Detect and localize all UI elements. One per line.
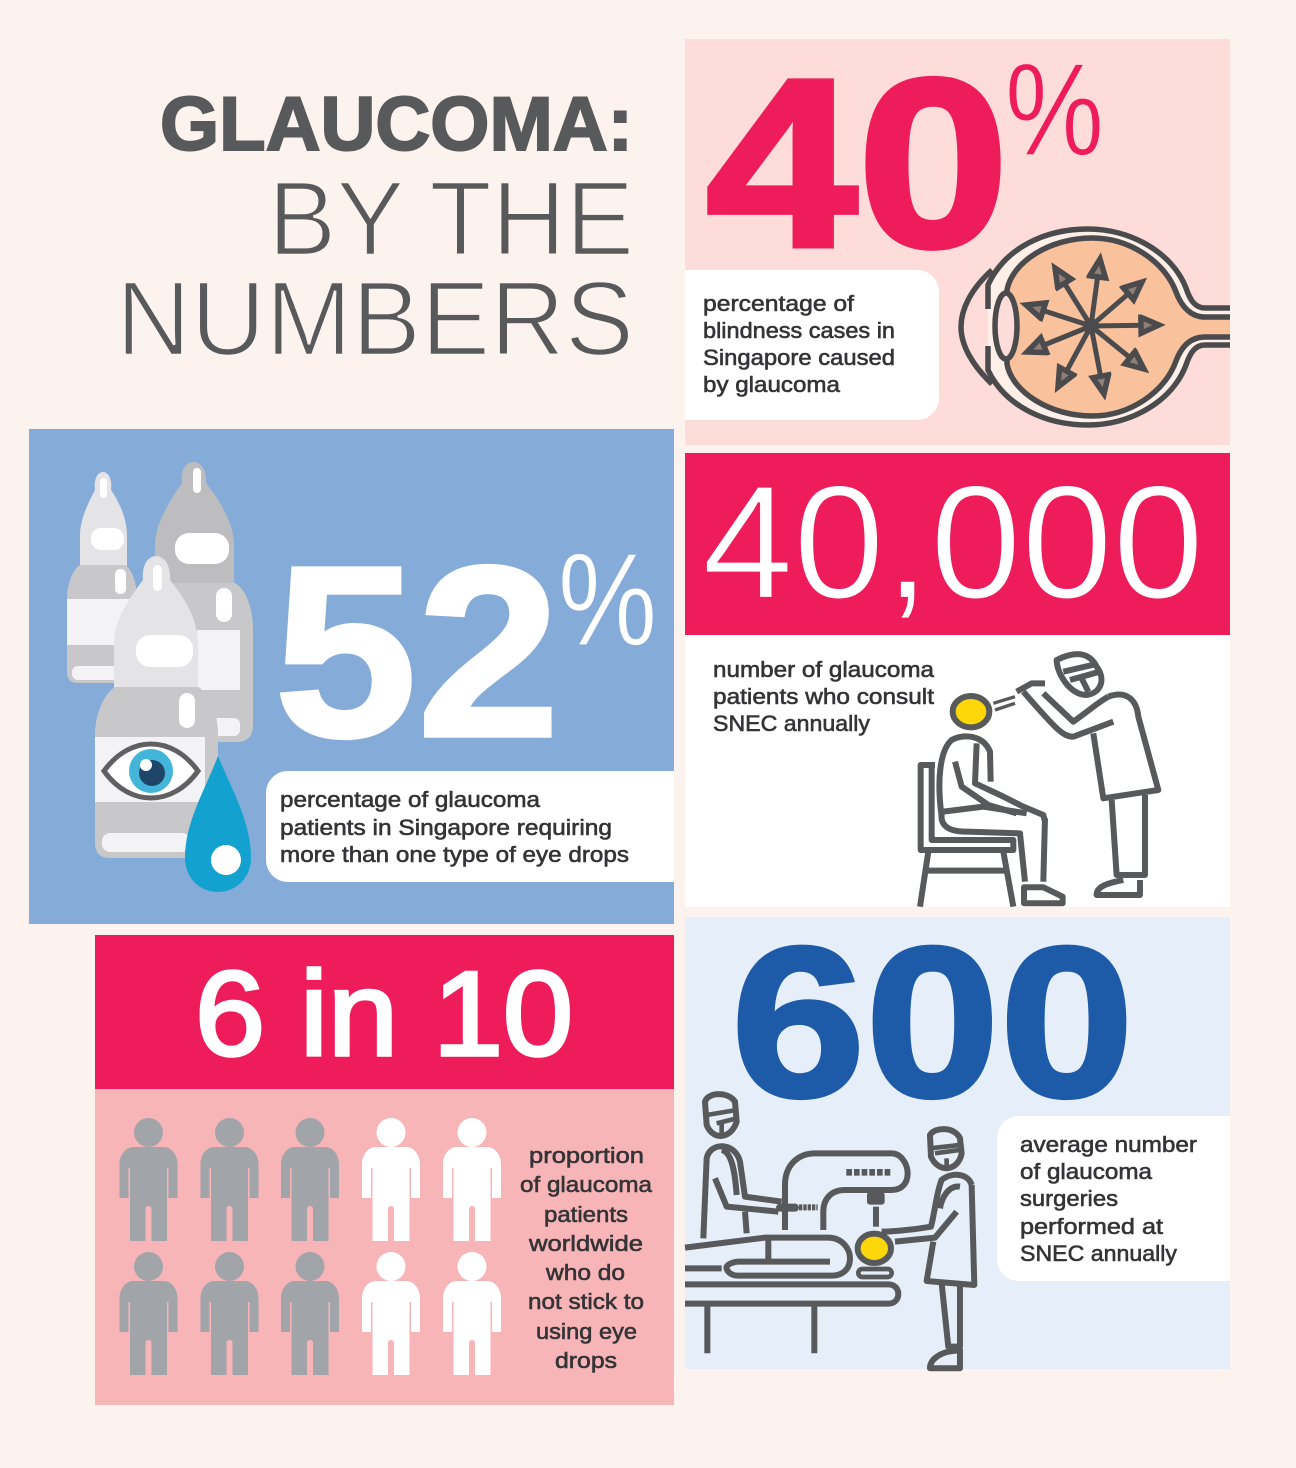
label: adherence caption: drops [555,1348,617,1373]
icon: eyeball with pressure arrows [961,229,1230,425]
label: surgeries caption: of glaucoma [1020,1159,1153,1184]
label: consult caption [713,657,935,736]
label: blindness caption: blindness cases in [703,318,895,343]
title: NUMBERS [116,260,634,378]
icon: ten people pictogram [120,1118,501,1375]
icon: front bottle with eye [95,556,218,858]
icon: water drop [185,756,251,892]
label: adherence caption: of glaucoma [520,1172,653,1197]
label: adherence caption [520,1143,653,1373]
label: surgeries caption [997,1116,1230,1281]
label: surgeries caption: SNEC annually [1020,1241,1178,1266]
label: adherence caption: patients [544,1202,628,1227]
statistic: 40%: % [1005,36,1104,183]
label: eye drops caption: more than one type of eye drops [280,842,629,867]
label: blindness caption: Singapore caused [703,345,895,370]
statistic: 40%: 40 [706,29,1009,297]
icon: surgery scene [685,1094,974,1368]
icon: back left bottle [67,472,137,683]
label: consult caption: number of glaucoma [713,657,935,682]
statistic: 600: 600 [731,903,1134,1142]
title: BY THE [268,160,634,278]
label: consult caption: patients who consult [713,684,935,709]
statistic: 52%: % [558,526,657,673]
statistic: 40% [706,29,1104,297]
label: adherence caption: using eye [536,1319,637,1344]
label: adherence caption: proportion [529,1143,644,1168]
label: eye drops caption: patients in Singapore requiring [280,815,612,840]
label: adherence caption: who do [545,1260,625,1285]
label: blindness caption: percentage of [703,291,855,316]
statistic: 52%: 52 [274,515,560,788]
panel: 40,000 patients [685,452,1230,907]
label: surgeries caption: surgeries [1020,1186,1118,1211]
panel: 6 in 10 [95,935,674,1405]
title: GLAUCOMA: [160,82,633,167]
panel: 52 percent eye drops [29,429,674,924]
icon: eye on label [104,744,198,798]
icon: doctor examining seated patient [920,654,1158,907]
banner: 6 in 10 [95,935,674,1089]
label: eye drops caption [266,771,674,882]
banner: 40,000: 40,000 [702,452,1204,633]
icon: back right bottle [155,462,253,742]
label: surgeries caption: average number [1020,1132,1198,1157]
label: surgeries caption: performed at [1020,1214,1164,1239]
banner: 6 in 10: 6 in 10 [195,947,573,1081]
label: adherence caption: worldwide [528,1231,643,1256]
label: adherence caption: not stick to [528,1289,644,1314]
label: eye drops caption: percentage of glaucoma [280,787,541,812]
panel: 600 surgeries [685,903,1230,1369]
label: consult caption: SNEC annually [713,711,871,736]
title [116,82,634,378]
label: blindness caption [685,270,939,420]
panel: 40 percent blindness [685,29,1230,445]
label: blindness caption: by glaucoma [703,372,841,397]
